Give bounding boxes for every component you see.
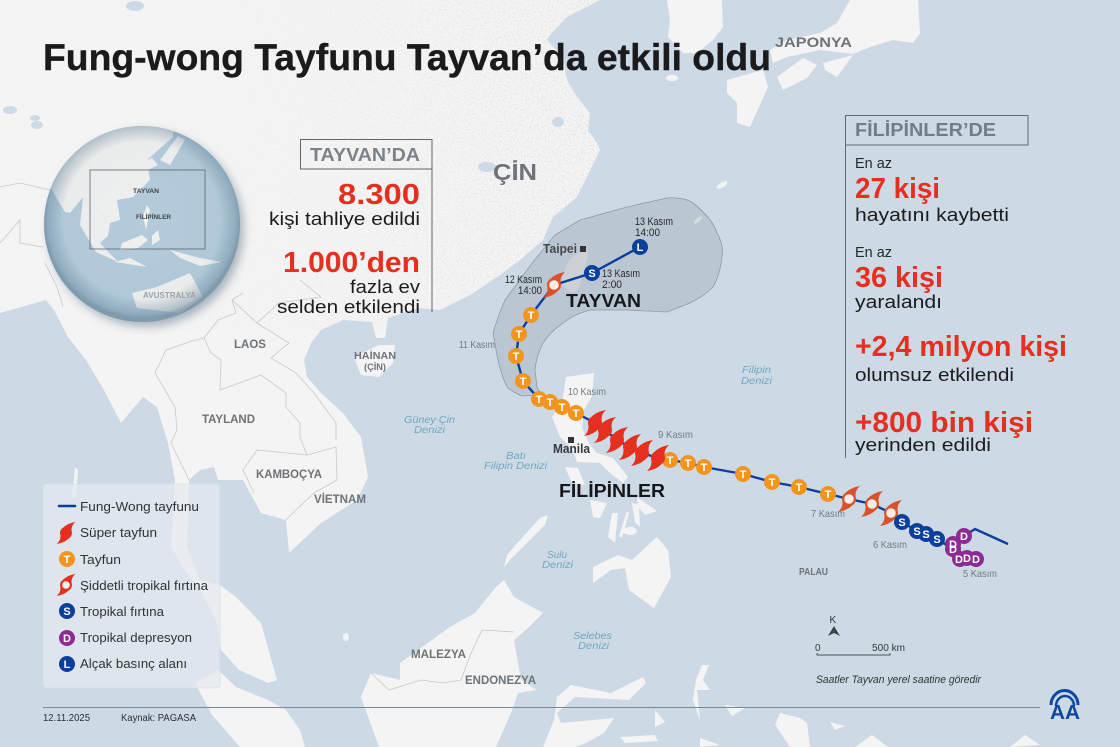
track markers: tropical depressions: D — [949, 544, 957, 556]
sea labels: Denizi — [578, 641, 610, 652]
panel: Tayvan'da — [269, 140, 432, 317]
city: Manila: Manila — [553, 441, 591, 456]
track markers: typhoons: T — [513, 351, 520, 363]
date labels on track: 13 Kasım — [602, 268, 640, 280]
sea labels: Filipin Denizi — [484, 461, 548, 472]
country labels: LAOS — [234, 337, 266, 351]
title: Fung-wong Tayfunu Tayvan’da etkili oldu — [43, 37, 771, 78]
note: local time: Saatler Tayvan yerel saatine göredir — [816, 674, 982, 686]
focus label: Tayvan: TAYVAN — [566, 291, 641, 311]
track markers: typhoons: T — [520, 376, 527, 388]
stat: evacuated — [269, 179, 420, 229]
track markers: tropical depressions: D — [949, 539, 957, 551]
stat: displaced: yerinden edildi — [855, 434, 991, 455]
stat: affected — [855, 331, 1067, 385]
legend: typhoon — [59, 551, 121, 567]
icon: AA logo: AA — [1050, 702, 1080, 724]
country labels: ÇİN — [493, 159, 537, 185]
date labels on track: 5 Kasım — [963, 568, 997, 580]
country labels: TAYLAND — [202, 412, 255, 426]
date labels on track: 2:00 — [602, 279, 622, 291]
legend: tropical depression: D — [63, 633, 71, 645]
stat: affected: +2,4 milyon kişi — [855, 331, 1067, 363]
legend: super typhoon — [57, 522, 157, 544]
legend: low pressure area: Alçak basınç alanı — [80, 656, 187, 671]
track markers: tropical storms: S — [898, 517, 906, 529]
track markers: tropical storms: S — [588, 268, 596, 280]
panel: Filipinler'de — [846, 116, 1067, 458]
track markers: typhoons: T — [559, 402, 566, 414]
track markers: severe tropical storms — [543, 272, 902, 526]
track markers: tropical storms: S — [933, 534, 941, 546]
date labels on track: 6 Kasım — [873, 539, 907, 551]
legend: tropical storm: S — [63, 606, 71, 618]
date labels on track: 9 Kasım — [658, 429, 693, 441]
sea labels: Selebes — [573, 631, 612, 642]
legend: severe tropical storm: Şiddetli tropikal fırtına — [80, 578, 209, 593]
sea labels: Denizi — [741, 376, 773, 387]
track markers: typhoons — [508, 307, 836, 502]
track markers: typhoons: T — [796, 482, 803, 494]
inset label: Tayvan: TAYVAN — [133, 188, 159, 195]
icon: AA logo — [1050, 690, 1080, 724]
legend: typhoon: Tayfun — [80, 552, 121, 567]
stat: displaced: +800 bin kişi — [855, 407, 1033, 439]
stat: dead — [855, 155, 1009, 225]
stat: homes flooded: selden etkilendi — [277, 296, 420, 317]
stat: affected: olumsuz etkilendi — [855, 364, 1014, 385]
legend — [43, 484, 220, 688]
country borders — [0, 183, 514, 690]
stat: dead: hayatını kaybetti — [855, 204, 1009, 225]
country labels: PALAU — [799, 567, 828, 578]
lakes and rivers — [3, 1, 564, 172]
track markers: typhoons: T — [685, 458, 692, 470]
track markers: tropical depressions: D — [955, 554, 963, 566]
sea labels: Denizi — [414, 425, 446, 436]
date labels on track: 11 Kasım — [459, 339, 495, 351]
city: Taipei: Taipei — [543, 242, 577, 256]
stat: injured — [855, 244, 943, 312]
stat: injured: En az — [855, 244, 892, 261]
legend: severe tropical storm — [57, 574, 209, 596]
legend: tropical depression: Tropikal depresyon — [80, 630, 192, 645]
panel heading: FİLİPİNLER’DE — [855, 120, 996, 140]
legend: low pressure area: L — [64, 659, 71, 671]
country labels: HAİNAN — [354, 349, 396, 362]
stat: injured: 36 kişi — [855, 262, 943, 294]
track markers: tropical storms — [584, 265, 945, 547]
date labels on track: 10 Kasım — [568, 386, 606, 398]
legend: super typhoon: Süper tayfun — [80, 525, 157, 540]
country labels: KAMBOÇYA — [256, 467, 322, 481]
stat: displaced — [855, 407, 1033, 455]
country labels — [202, 34, 852, 687]
sea labels: Sulu — [547, 550, 567, 561]
track markers: typhoons: T — [701, 462, 708, 474]
date labels on track: 14:00 — [518, 285, 542, 297]
track markers: typhoons: T — [528, 310, 535, 322]
country labels: JAPONYA — [775, 34, 852, 50]
track markers: typhoons: T — [536, 394, 543, 406]
stat: evacuated: kişi tahliye edildi — [269, 208, 420, 229]
stat: dead: En az — [855, 155, 892, 172]
inset label: Avustralya: AVUSTRALYA — [143, 291, 196, 300]
stat: homes flooded — [277, 247, 421, 317]
panel heading: TAYVAN’DA — [310, 145, 420, 165]
country labels: ENDONEZYA — [465, 673, 536, 687]
stat: homes flooded: 1.000’den — [283, 247, 420, 279]
scale bar: 0 — [815, 643, 821, 654]
track marker: low pressure area — [632, 239, 648, 255]
track markers: tropical storms: S — [922, 529, 930, 541]
footer: source: Kaynak: PAGASA — [121, 712, 196, 724]
stat: homes flooded: fazla ev — [350, 276, 421, 297]
track markers: typhoons: T — [667, 455, 674, 467]
scale bar — [815, 643, 905, 655]
sea labels: Filipin — [742, 365, 771, 376]
track markers: typhoons: T — [516, 329, 523, 341]
track markers: typhoons: T — [769, 477, 776, 489]
sea labels: Batı — [506, 451, 526, 462]
legend: track line: Fung-Wong tayfunu — [80, 499, 199, 514]
north arrow — [828, 615, 840, 636]
track markers: tropical depressions — [945, 528, 984, 567]
date labels on track: 7 Kasım — [811, 508, 845, 520]
date labels on track: 12 Kasım — [505, 274, 542, 286]
focus label: Filipinler: FİLİPİNLER — [559, 481, 665, 501]
track marker: low pressure area: L — [637, 242, 644, 254]
track markers: typhoons: T — [825, 489, 832, 501]
sea labels: Güney Çin — [404, 415, 455, 426]
stat: injured: yaralandı — [855, 291, 942, 312]
track markers: tropical storms: S — [913, 526, 921, 538]
country labels: VİETNAM — [314, 491, 366, 506]
inset frame — [90, 170, 205, 249]
date labels on track: 14:00 — [635, 227, 660, 239]
footer rule — [43, 706, 1040, 708]
legend: tropical storm: Tropikal fırtına — [80, 604, 165, 619]
forecast cone — [493, 198, 722, 396]
track markers: tropical depressions: D — [963, 553, 971, 565]
stat: dead: 27 kişi — [855, 173, 940, 205]
track markers: typhoons: T — [740, 469, 747, 481]
track markers: typhoons: T — [573, 408, 580, 420]
track markers: tropical depressions: D — [960, 531, 968, 543]
country labels: (ÇİN) — [364, 362, 386, 373]
north arrow: K — [830, 615, 836, 626]
track markers: typhoons: T — [547, 397, 554, 409]
sea labels: Denizi — [542, 560, 574, 571]
inset label: Filipinler: FİLİPİNLER — [136, 213, 171, 221]
storm track line — [516, 247, 1008, 549]
scale bar: 500 km — [872, 643, 905, 654]
stat: evacuated: 8.300 — [338, 179, 420, 211]
globe locator inset — [30, 120, 243, 326]
date labels on track: 13 Kasım — [635, 216, 673, 228]
sea labels — [404, 365, 773, 652]
date labels on track — [459, 216, 997, 580]
country labels: MALEZYA — [411, 647, 466, 661]
footer: date: 12.11.2025 — [43, 712, 90, 724]
track markers: tropical depressions: D — [972, 554, 980, 566]
legend: typhoon: T — [64, 554, 71, 566]
track markers: super typhoons — [584, 410, 669, 471]
